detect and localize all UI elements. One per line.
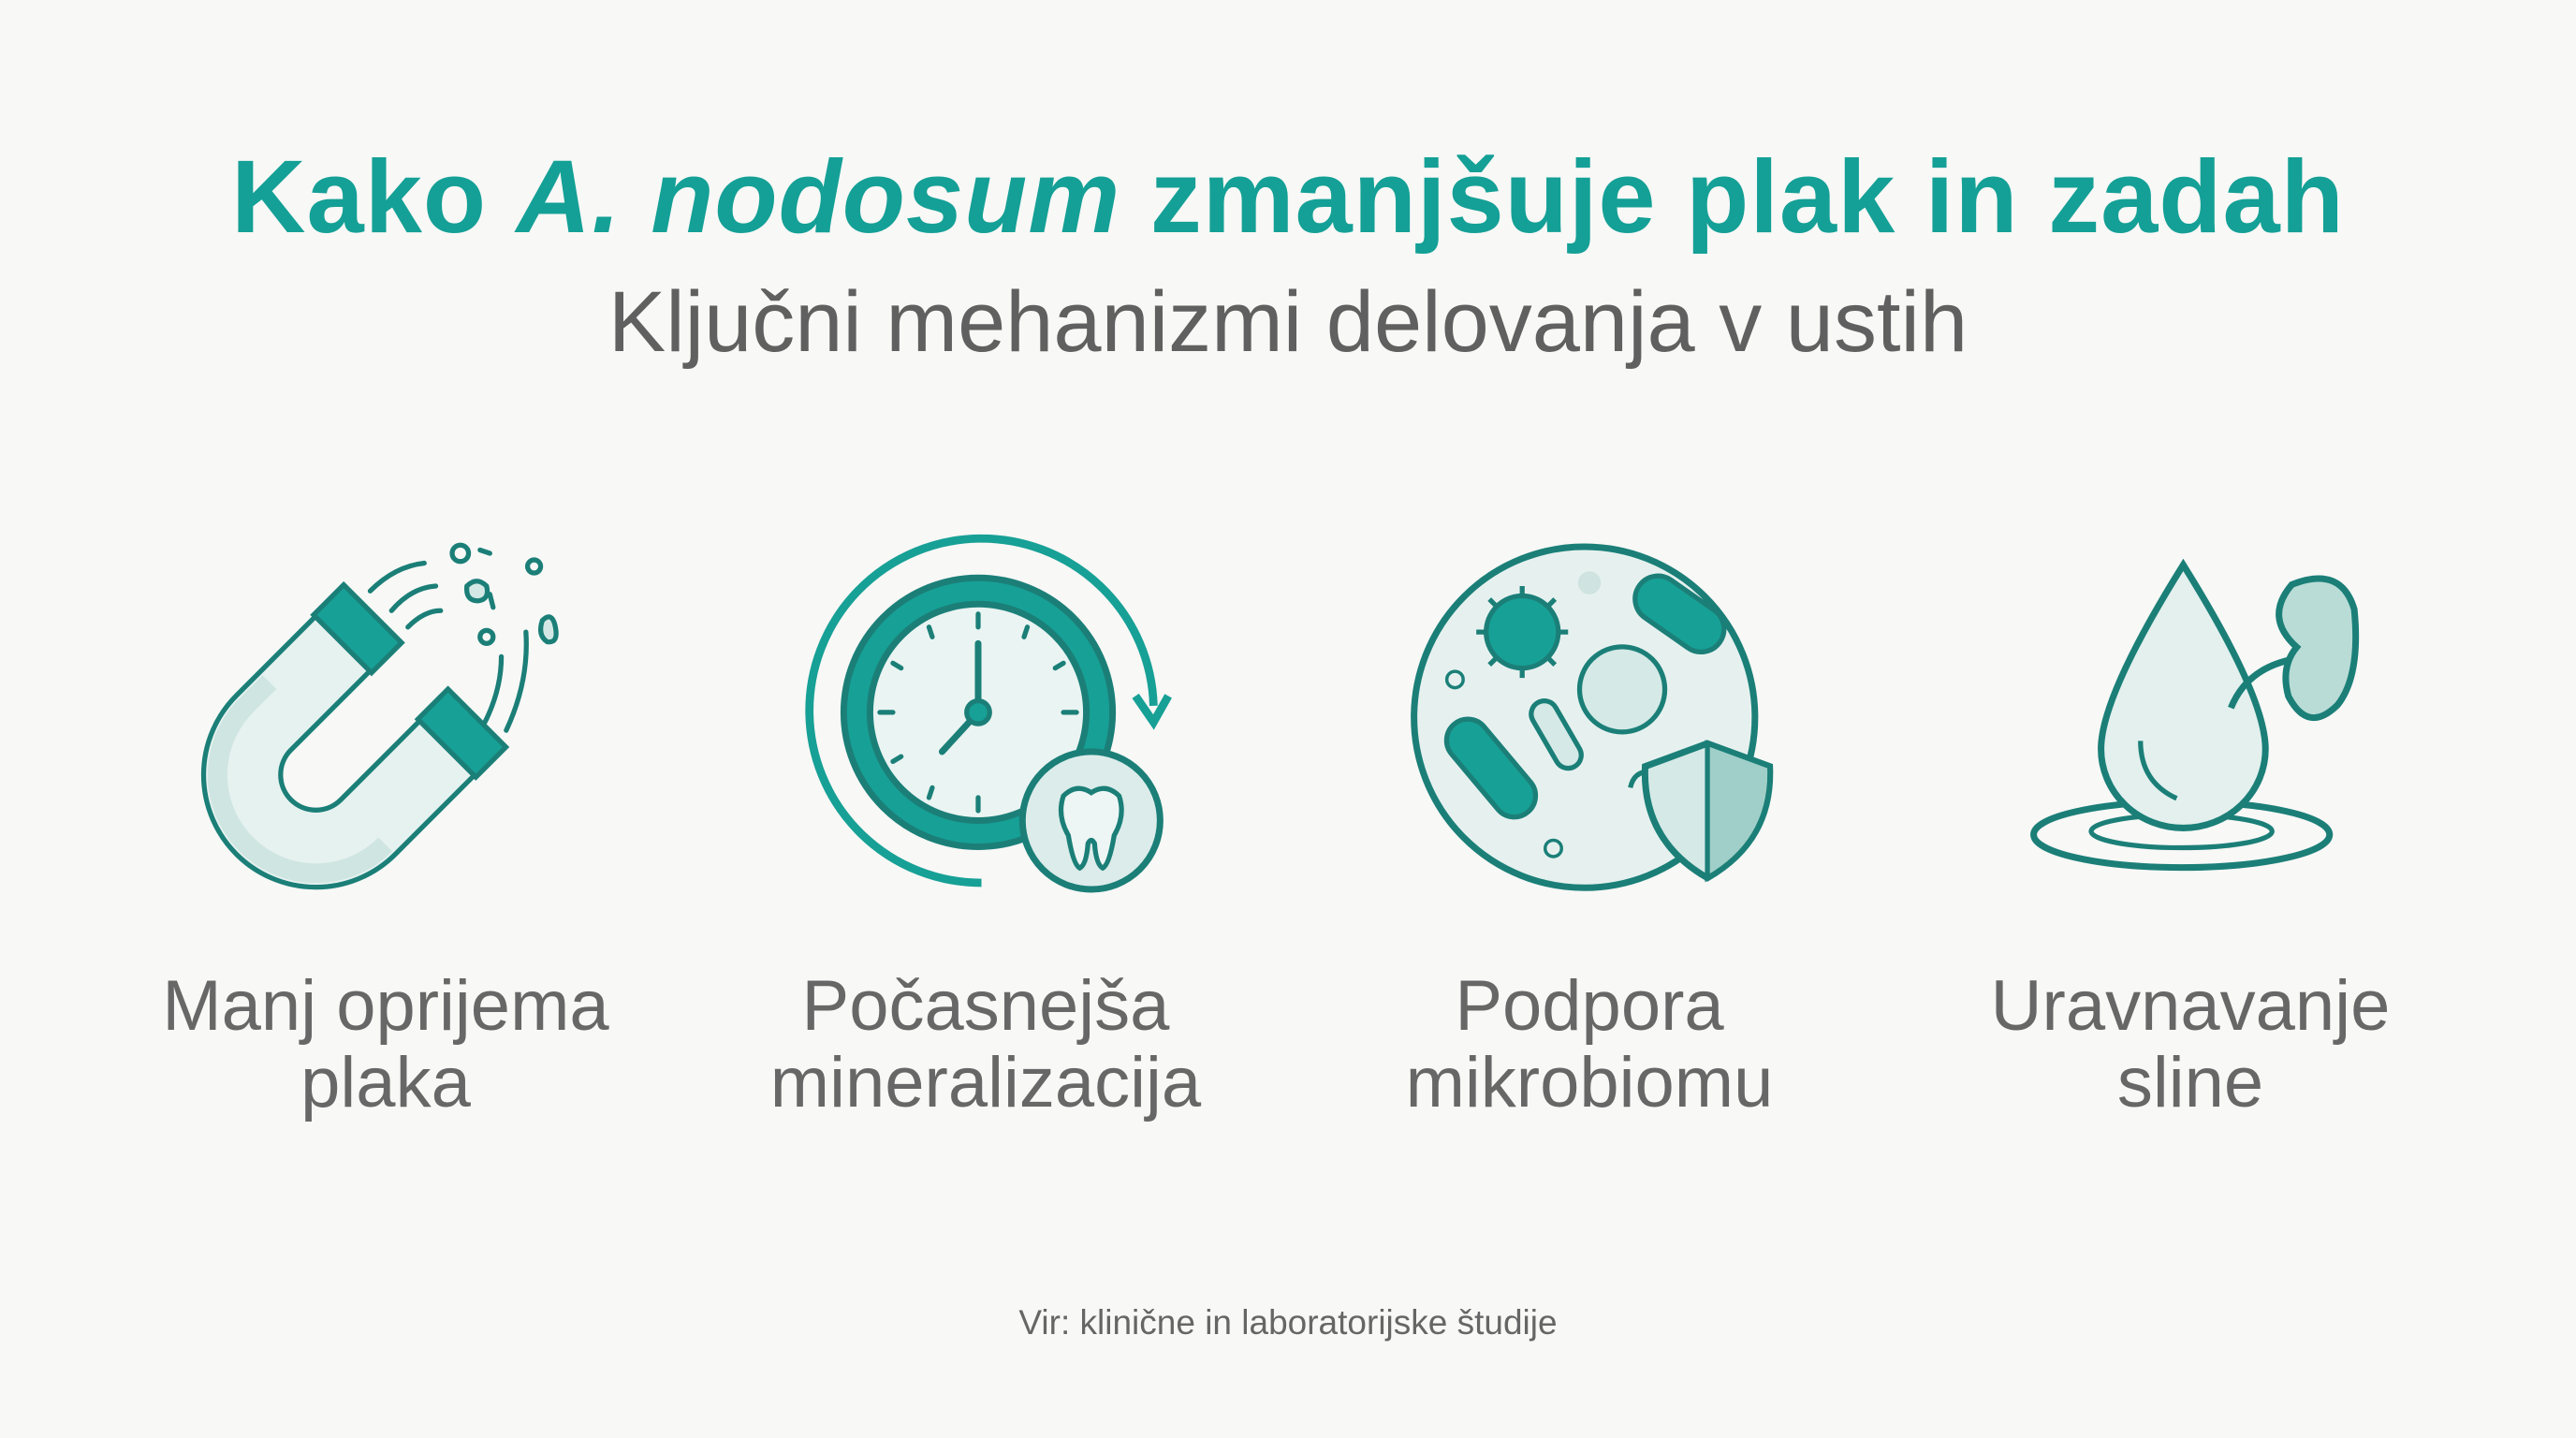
source note: Vir: klinične in laboratorijske študije	[1018, 1303, 1558, 1342]
label: Podpora mikrobiomu: Podpora	[1455, 966, 1724, 1046]
label: Uravnavanje sline: Uravnavanje	[1991, 966, 2390, 1046]
label: Uravnavanje sline: sline	[2117, 1043, 2263, 1123]
title: Kako A. nodosum zmanjšuje plak in zadah	[231, 139, 2345, 255]
icon: clock with tooth	[805, 534, 1172, 893]
icon: magnet	[200, 543, 559, 889]
icon: saliva drop and gland	[2030, 558, 2359, 871]
label: Podpora mikrobiomu	[1406, 966, 1773, 1123]
icon: microbiome with shield	[1411, 543, 1773, 891]
label: Počasnejša mineralizacija	[770, 966, 1202, 1123]
subtitle: Ključni mehanizmi delovanja v ustih	[608, 274, 1968, 370]
label: Manj oprijema plaka	[162, 966, 609, 1123]
label: Podpora mikrobiomu: mikrobiomu	[1406, 1043, 1773, 1123]
label: Uravnavanje sline	[1991, 966, 2390, 1123]
label: Počasnejša mineralizacija: mineralizacija	[770, 1043, 1201, 1123]
label: Manj oprijema plaka: plaka	[300, 1043, 471, 1123]
label: Počasnejša mineralizacija: Počasnejša	[802, 966, 1169, 1046]
label: Manj oprijema plaka: Manj oprijema	[162, 966, 609, 1046]
